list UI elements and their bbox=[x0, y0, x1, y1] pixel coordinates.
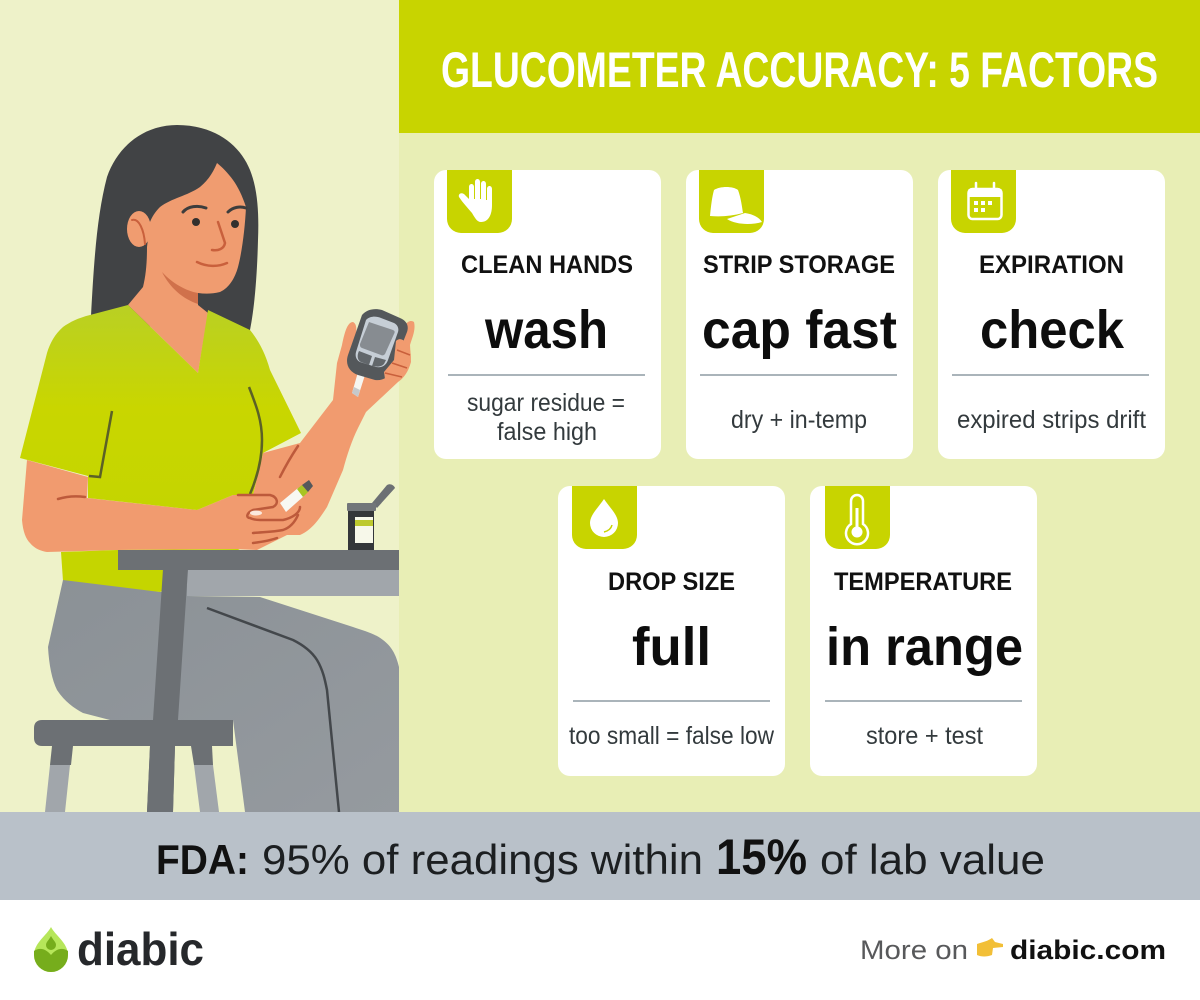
card: expiration bbox=[938, 170, 1165, 459]
card: strip storage: dry + in-temp bbox=[731, 406, 867, 434]
hair bbox=[91, 125, 258, 330]
card: temperature: in range bbox=[826, 617, 1023, 677]
footer bbox=[0, 900, 1200, 1000]
trousers bbox=[48, 580, 399, 812]
FDA callout band: FDA: bbox=[156, 836, 249, 883]
strip bottle bbox=[347, 484, 395, 550]
card: temperature: store + test bbox=[866, 722, 983, 750]
FDA callout band: 95% of readings within bbox=[262, 836, 703, 883]
skin crease lines bbox=[58, 446, 300, 543]
upper arm, forearm and hand bbox=[22, 321, 415, 552]
card: strip storage: STRIP STORAGE bbox=[703, 251, 895, 279]
icon: thermometer bbox=[825, 486, 890, 549]
card: temperature: TEMPERATURE bbox=[834, 568, 1012, 596]
icon: pointing hand bbox=[977, 938, 1003, 956]
card: clean hands bbox=[434, 170, 661, 459]
lancet pen bbox=[250, 480, 313, 516]
card: drop size: DROP SIZE bbox=[608, 568, 735, 596]
card: strip storage: cap fast bbox=[702, 300, 897, 360]
skin: neck, face and ear bbox=[127, 163, 246, 373]
facial features bbox=[132, 206, 246, 304]
shirt bbox=[20, 305, 301, 510]
table bbox=[118, 550, 399, 812]
website link: diabic.com bbox=[1010, 935, 1166, 965]
stool bbox=[34, 720, 233, 812]
website link bbox=[860, 935, 1166, 965]
FDA callout band: of lab value bbox=[820, 836, 1045, 883]
glucometer bbox=[347, 309, 408, 397]
card: drop size bbox=[558, 486, 785, 776]
fingers gripping the meter bbox=[384, 339, 411, 379]
card: drop size: too small = false low bbox=[569, 722, 775, 750]
FDA callout band: 15% bbox=[716, 829, 807, 885]
diabic logo: diabic bbox=[77, 923, 204, 975]
FDA callout band bbox=[0, 812, 1200, 900]
card: clean hands: sugar residue = bbox=[467, 389, 625, 417]
card: expiration: EXPIRATION bbox=[979, 251, 1124, 279]
title banner bbox=[399, 0, 1200, 133]
card: temperature bbox=[810, 486, 1037, 776]
icon: hand bbox=[447, 170, 512, 233]
card: drop size: full bbox=[632, 617, 711, 677]
card: clean hands: false high bbox=[497, 418, 597, 446]
card: expiration: expired strips drift bbox=[957, 406, 1146, 434]
website link: More on bbox=[860, 935, 968, 965]
card: expiration: check bbox=[980, 300, 1125, 360]
icon: calendar bbox=[951, 170, 1016, 233]
shirt lower hem bbox=[61, 549, 240, 592]
trouser seam bbox=[207, 608, 339, 812]
icon: cap bbox=[699, 170, 764, 233]
card: clean hands: CLEAN HANDS bbox=[461, 251, 633, 279]
card: clean hands: wash bbox=[484, 300, 608, 360]
icon: drop bbox=[572, 486, 637, 549]
illustration: woman testing blood sugar at a table bbox=[20, 125, 415, 812]
card: strip storage bbox=[686, 170, 913, 459]
shirt fold lines bbox=[89, 387, 262, 494]
